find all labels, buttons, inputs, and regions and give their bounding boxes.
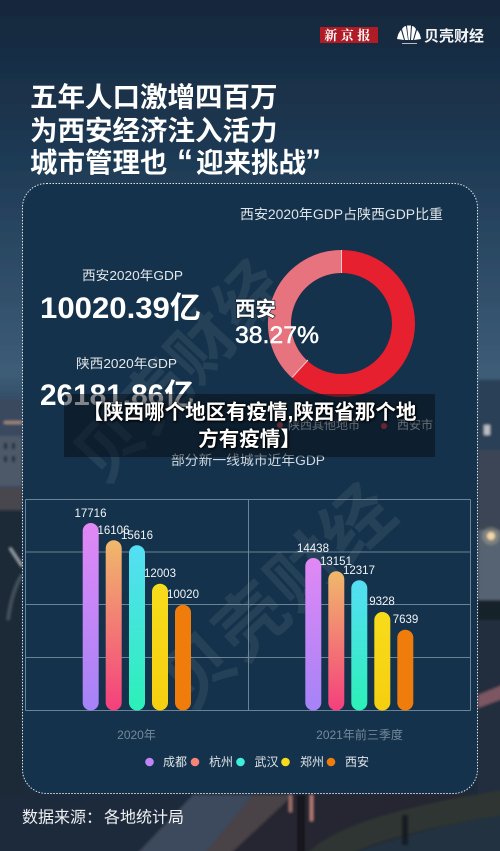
- overlay caption: 【陕西哪个地区有疫情,陕西省那个地: [83, 401, 416, 424]
- logo: 贝壳财经: 贝壳财经: [424, 27, 484, 45]
- grid lines: [26, 500, 470, 710]
- overlay caption: [64, 394, 435, 457]
- watermark: lower: 贝壳财经: [147, 470, 411, 723]
- donut label: 西安: [235, 298, 276, 321]
- donut chart: [279, 250, 404, 386]
- legend: donut: 西安市: [397, 417, 433, 432]
- donut label: [235, 298, 319, 349]
- legend: donut: 陕西其他地市: [288, 417, 360, 432]
- title: ”: [305, 143, 321, 179]
- value labels: 12317: [343, 565, 375, 577]
- heading: bar chart: 部分新一线城市近年GDP: [171, 452, 325, 468]
- stat: Xi'an GDP: 10020.39亿: [40, 292, 201, 325]
- bar chart: [26, 500, 470, 742]
- stat: Xi'an GDP: 西安2020年GDP: [82, 268, 183, 283]
- logo: 新京报: 新京报: [324, 28, 374, 43]
- title: 迎来挑战: [196, 147, 306, 178]
- legend: cities: 郑州: [300, 754, 324, 769]
- overlay caption: 方有疫情】: [198, 428, 301, 451]
- value labels: 16106: [98, 525, 129, 537]
- legend: donut: [277, 417, 433, 432]
- value labels: 17716: [75, 508, 106, 520]
- watermark: upper: 贝壳财经: [60, 246, 300, 496]
- value labels: 10020: [167, 589, 199, 601]
- source note: 数据来源：: [22, 810, 102, 826]
- heading: donut chart: 西安2020年GDP占陕西GDP比重: [240, 207, 443, 222]
- value labels: [75, 508, 418, 626]
- axis labels: 2020年: [117, 728, 156, 742]
- legend: cities: [145, 754, 369, 769]
- source note: 各地统计局: [104, 808, 184, 826]
- value labels: 12003: [144, 568, 176, 580]
- value labels: 9328: [369, 596, 395, 608]
- icon: shell: [397, 26, 421, 44]
- logo: 贝壳财经: [397, 26, 484, 45]
- title: 城市管理也: [30, 147, 168, 178]
- title: 为西安经济注入活力: [30, 115, 278, 146]
- title: “: [177, 143, 193, 179]
- legend: cities: 成都: [163, 755, 187, 769]
- value labels: 13151: [320, 556, 352, 568]
- legend: cities: 杭州: [209, 754, 233, 769]
- axis labels: 2021年前三季度: [316, 727, 403, 742]
- legend: cities: 西安: [345, 754, 369, 769]
- title: 五年人口激增四百万: [30, 82, 278, 112]
- legend: cities: 武汉: [254, 755, 279, 769]
- title: [30, 82, 321, 179]
- bottom road: [0, 795, 500, 851]
- bars: 2021 first three quarters: [305, 558, 413, 710]
- stat: Shaanxi GDP: 陕西2020年GDP: [76, 356, 177, 371]
- value labels: 15616: [121, 530, 153, 542]
- panel: main card: [22, 184, 478, 794]
- value labels: 14438: [297, 543, 329, 555]
- stat: Shaanxi GDP: [40, 356, 194, 412]
- axis labels: [117, 727, 403, 742]
- stat: Xi'an GDP: [40, 268, 201, 325]
- value labels: 7639: [393, 614, 418, 626]
- bars: 2020: [83, 523, 191, 710]
- donut label: 38.27%: [235, 322, 319, 349]
- stat: Shaanxi GDP: 26181.86亿: [40, 379, 194, 412]
